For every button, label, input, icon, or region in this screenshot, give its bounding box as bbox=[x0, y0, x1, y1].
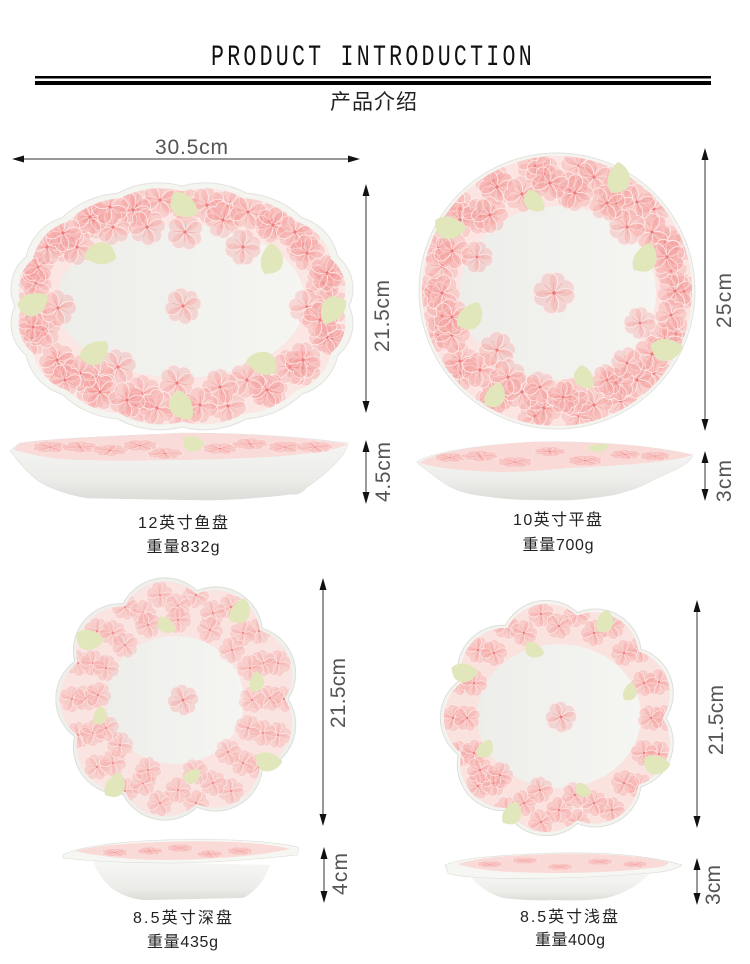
depth arrow: 4cm: 4cm bbox=[329, 853, 352, 895]
icon: centre flower bbox=[526, 265, 582, 321]
label: name and weight: 12英寸鱼盘 bbox=[138, 513, 228, 532]
side view: deep plate bbox=[63, 839, 298, 900]
height arrow: 25cm bbox=[702, 148, 736, 431]
label: name and weight bbox=[513, 510, 602, 554]
depth arrow: 3cm: 3cm bbox=[702, 865, 725, 905]
label: name and weight: 8.5英寸深盘 bbox=[133, 908, 232, 927]
double rule divider bbox=[35, 76, 711, 85]
label: name and weight bbox=[133, 908, 232, 951]
panel: 12 inch fish plate bbox=[8, 136, 395, 556]
width arrow: 30.5cm: 30.5cm bbox=[155, 136, 228, 159]
height arrow: 21.5cm bbox=[362, 184, 394, 413]
label: name and weight: 重量400g bbox=[535, 931, 605, 949]
label: name and weight: 10英寸平盘 bbox=[513, 510, 602, 529]
panel: 8.5 inch deep plate bbox=[55, 577, 347, 950]
subtitle: 产品介绍 bbox=[330, 91, 417, 114]
label: name and weight: 重量700g bbox=[522, 536, 594, 554]
depth arrow: 4cm bbox=[320, 847, 352, 903]
icon: centre flower bbox=[162, 285, 204, 327]
label: name and weight bbox=[520, 907, 618, 949]
depth arrow: 3cm bbox=[702, 451, 736, 502]
height arrow: 21.5cm: 21.5cm bbox=[327, 658, 350, 728]
label: name and weight: 8.5英寸浅盘 bbox=[520, 907, 618, 926]
side view: round plate bbox=[417, 442, 693, 500]
label: name and weight: 重量832g bbox=[146, 538, 220, 556]
top view: flower shaped shallow plate bbox=[440, 600, 674, 836]
title: PRODUCT INTRODUCTION bbox=[211, 40, 535, 74]
icon: centre flower bbox=[541, 697, 581, 737]
height arrow: 21.5cm: 21.5cm bbox=[371, 280, 394, 352]
top view: flower shaped deep plate bbox=[55, 577, 296, 821]
depth arrow: 4.5cm bbox=[362, 440, 395, 504]
panel: 10 inch flat plate bbox=[406, 142, 736, 554]
icon: centre flower bbox=[164, 681, 202, 719]
height arrow: 25cm: 25cm bbox=[713, 273, 736, 328]
panel: 8.5 inch shallow plate bbox=[440, 600, 723, 948]
side view: shallow plate bbox=[445, 853, 682, 900]
top view: round plate bbox=[418, 152, 696, 430]
top view: oval scalloped plate bbox=[8, 177, 356, 434]
depth arrow: 3cm: 3cm bbox=[713, 460, 736, 502]
label: name and weight bbox=[138, 513, 228, 556]
depth arrow: 3cm bbox=[694, 858, 725, 905]
height arrow: 21.5cm bbox=[694, 600, 728, 828]
width arrow: 30.5cm bbox=[12, 136, 360, 162]
side view: oval plate bbox=[10, 432, 348, 500]
height arrow: 21.5cm bbox=[320, 578, 350, 826]
height arrow: 21.5cm: 21.5cm bbox=[705, 685, 728, 755]
label: name and weight: 重量435g bbox=[147, 933, 218, 951]
depth arrow: 4.5cm: 4.5cm bbox=[372, 442, 395, 502]
